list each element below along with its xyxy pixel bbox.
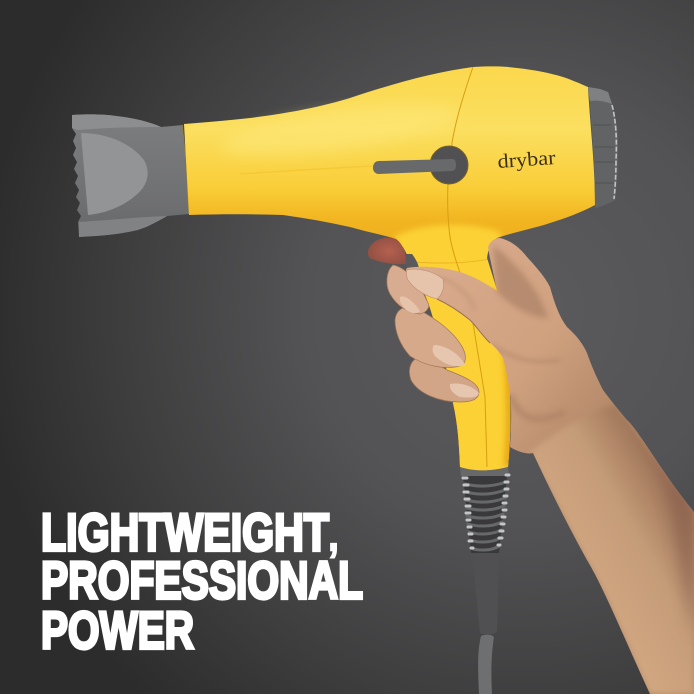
hair dryer [72, 66, 618, 694]
little fingernail [450, 383, 479, 398]
hand and arm [368, 238, 694, 694]
rear vent cap [588, 87, 618, 208]
trigger upper [405, 254, 419, 270]
arm, palm and thumb [406, 238, 694, 694]
body highlight [218, 93, 462, 167]
handle shading [395, 225, 520, 480]
headline line 1: LIGHTWEIGHT [41, 503, 329, 562]
headline line 2: PROFESSIONAL [41, 552, 363, 611]
index fingertip [368, 238, 407, 264]
body groove [240, 166, 375, 174]
body seam [448, 67, 487, 467]
trigger lower [422, 306, 434, 330]
drybar logo: drybar [497, 147, 557, 173]
little finger [409, 358, 479, 402]
ring finger [395, 307, 465, 368]
thumb edge [437, 299, 490, 343]
ring fingernail [433, 345, 465, 366]
cord boot [473, 554, 498, 634]
nozzle [72, 114, 189, 237]
nozzle panel [81, 133, 148, 215]
ribbed cord strain relief [463, 475, 509, 553]
strain relief collar [460, 467, 509, 479]
middle finger [387, 265, 429, 314]
thumbnail [406, 269, 444, 299]
power cord [478, 635, 494, 694]
headline [41, 503, 363, 660]
headline line 3: POWER [41, 601, 194, 660]
middle fingernail [400, 296, 420, 313]
dryer body [184, 66, 595, 470]
speed switch [373, 146, 468, 184]
headline line 1: , [328, 508, 339, 560]
